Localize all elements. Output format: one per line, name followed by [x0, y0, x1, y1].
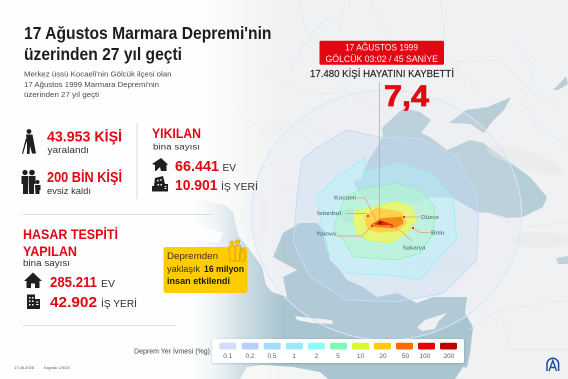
- Egypt coast land: [240, 365, 328, 379]
- legend box: [212, 339, 464, 363]
- vertical divider: [136, 123, 138, 199]
- legend values: 0.5: [267, 353, 277, 360]
- city dots: [367, 215, 414, 229]
- Duzce: Düzce: [421, 215, 439, 221]
- banner box: [320, 41, 444, 65]
- callout text: insan etkilendi: [167, 276, 230, 286]
- callout: 16 million affected: [164, 240, 248, 293]
- Bolu: Bolu: [431, 230, 444, 236]
- horizontal divider: [23, 214, 212, 216]
- Istanbul: İstanbul: [317, 210, 341, 217]
- injured number: 43.953 KİŞİ: [47, 129, 122, 146]
- city labels: [316, 196, 444, 252]
- red date banner: [320, 41, 444, 65]
- legend values: 5: [336, 353, 340, 360]
- homeless caption: evsiz kaldı: [47, 186, 91, 196]
- collapsed title: YIKILAN: [152, 125, 201, 141]
- damaged offices unit: İŞ YERİ: [101, 299, 137, 310]
- collapsed houses stat: [175, 158, 236, 175]
- legend: [212, 339, 464, 363]
- collapsed houses number: 66.441: [175, 158, 219, 175]
- damaged houses unit: EV: [101, 279, 115, 290]
- contour 20: [364, 207, 407, 233]
- description: [24, 70, 172, 99]
- collapsed offices unit: İŞ YERİ: [221, 182, 258, 193]
- icon: collapsed office: [152, 176, 168, 192]
- Levant land: [455, 367, 480, 379]
- description: Merkez üssü Kocaeli'nin Gölcük ilçesi olan: [24, 70, 172, 78]
- collapsed buildings heading: [152, 125, 201, 152]
- Yalova: Yalova: [316, 232, 337, 238]
- Black Sea: [353, 108, 547, 218]
- Kocaeli: Kocaeli: [334, 196, 356, 202]
- Cyprus: [417, 313, 447, 331]
- collapsed caption: bina sayısı: [153, 142, 200, 152]
- damaged offices stat: [50, 295, 137, 311]
- country borders: [237, 0, 568, 350]
- damage title: HASAR TESPİTİ: [23, 226, 118, 242]
- damage assessed heading: [23, 226, 118, 268]
- magnitude: 7,4: [384, 80, 429, 113]
- damage caption: bina sayısı: [23, 258, 70, 268]
- icon: injured person with cane: [22, 129, 36, 154]
- collapsed houses unit: EV: [222, 163, 236, 174]
- icon: house: [24, 272, 42, 288]
- legend values: 20: [379, 353, 387, 360]
- logo: AA: [547, 358, 559, 371]
- contour 50: [371, 217, 404, 228]
- callout box: [164, 247, 248, 293]
- injured caption: yaralandı: [48, 145, 89, 155]
- title: [24, 23, 272, 64]
- banner text: [326, 42, 438, 64]
- Crete: [295, 316, 333, 324]
- Sea of Azov: [449, 97, 511, 133]
- icon: homeless family: [22, 170, 40, 194]
- icon: family outline: [229, 240, 246, 261]
- title: üzerinden 27 yıl geçti: [24, 44, 182, 64]
- stat: injured: [47, 129, 122, 155]
- death toll: 17.480 KİŞİ HAYATINI KAYBETTİ: [310, 69, 454, 80]
- callout text: Depremden: [167, 251, 218, 261]
- stat: homeless: [47, 169, 122, 196]
- Italy heel land: [150, 215, 223, 250]
- collapsed offices number: 10.901: [175, 177, 218, 194]
- damaged houses stat: [50, 275, 115, 291]
- collapsed offices stat: [175, 177, 258, 194]
- damaged houses number: 285.211: [50, 275, 97, 291]
- legend label: Deprem Yer İvmesi (%g): [134, 347, 210, 356]
- terrain shading: [241, 139, 568, 271]
- Van lake: [556, 256, 568, 264]
- contour 0.5: [293, 130, 478, 302]
- contour 5: [333, 183, 435, 260]
- legend swatches: [219, 343, 457, 350]
- damage assessed heading: YAPILAN: [23, 243, 77, 259]
- contour 10: [353, 202, 417, 243]
- contour 0.1: [252, 90, 522, 340]
- legend values: 1: [292, 353, 296, 360]
- horizontal divider: [23, 324, 176, 326]
- Sakarya: Sakarya: [402, 246, 426, 252]
- Caspian fragment: [553, 76, 568, 90]
- contour 2: [317, 158, 457, 280]
- callout text: yaklaşık: [167, 264, 201, 274]
- earthquake intensity contours: [252, 90, 522, 340]
- rivers: [240, 15, 568, 150]
- footer date: 17.08.2026: [14, 365, 35, 370]
- Sea of Marmara: [337, 208, 364, 223]
- callout text: [167, 251, 244, 286]
- description: 17 Ağustos 1999 Marmara Depremi'nin: [24, 80, 159, 89]
- leader lines: [336, 198, 430, 241]
- legend values: 100: [420, 353, 431, 360]
- legend values: 0.1: [223, 353, 233, 360]
- legend values: 2: [315, 353, 319, 360]
- callout text: 16 milyon: [204, 264, 244, 274]
- legend values: 50: [402, 353, 409, 360]
- contour 100: [373, 221, 393, 225]
- legend values: 10: [357, 353, 364, 360]
- banner text: 17 AĞUSTOS 1999: [345, 42, 418, 52]
- Mediterranean and Aegean sea: [150, 190, 473, 379]
- legend values: 200: [444, 353, 455, 360]
- homeless number: 200 BİN KİŞİ: [47, 169, 122, 186]
- legend values: 0.2: [245, 353, 255, 360]
- footer source: Kaynak: USGS: [44, 365, 70, 370]
- icon: office building: [27, 294, 40, 309]
- description: üzerinden 27 yıl geçti: [24, 90, 99, 99]
- legend values: [223, 353, 455, 360]
- title: 17 Ağustos Marmara Depremi'nin: [24, 23, 272, 43]
- banner text: GÖLCÜK 03:02 / 45 SANİYE: [326, 54, 438, 64]
- damaged offices number: 42.902: [50, 295, 97, 311]
- epicentre star: [377, 220, 383, 225]
- icon: collapsed house: [152, 158, 168, 171]
- epicentre line: [378, 82, 380, 222]
